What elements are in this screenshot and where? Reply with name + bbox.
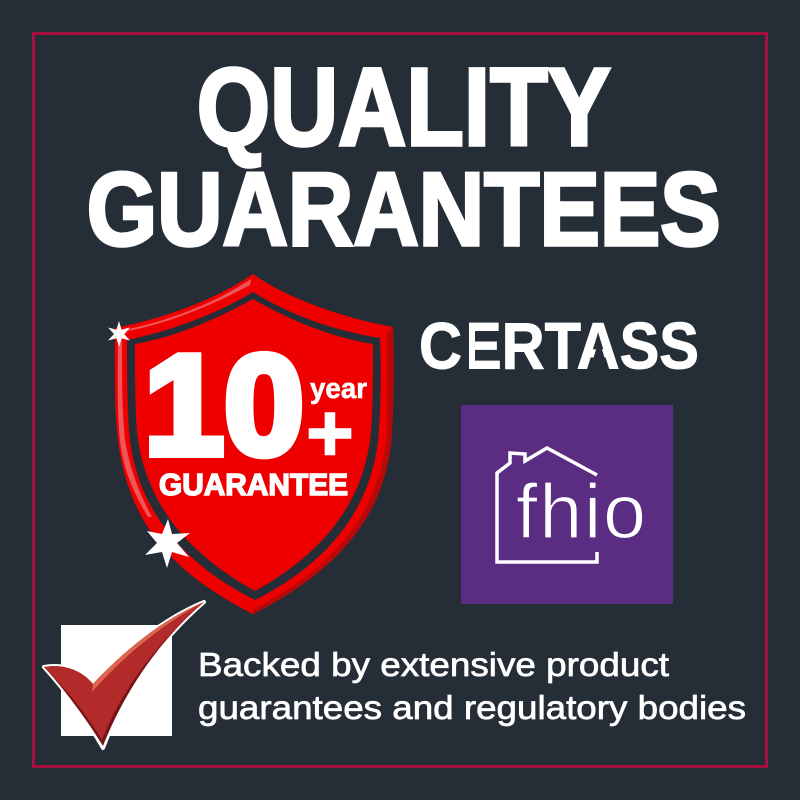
panel: fhio logo [461,405,673,604]
shield dark band [127,292,381,600]
icon: small star [108,321,130,347]
fhio wordmark: fhio [516,469,646,555]
rim shading [253,327,394,614]
white box [61,625,172,736]
shield inner face [135,299,373,591]
rim highlight [118,279,251,517]
title [87,46,721,268]
check outline [44,602,204,748]
title: GUARANTEES [87,152,721,268]
icon: check mark in box [44,602,204,748]
icon: red guarantee shield [108,274,394,614]
icon: large star [145,519,190,568]
shield outer rim [115,274,394,614]
shield text: plus: + [306,388,354,479]
caption: Backed by extensive product [198,646,669,683]
check shadow [44,602,204,746]
shield text: year: year [310,373,367,405]
caption: guarantees and regulatory bodies [198,689,746,726]
CERTASS logo: CERTASS [419,308,699,382]
check body [44,602,204,740]
shield text: 10: 10 [144,326,304,485]
title: QUALITY [197,46,611,169]
shield text: GUARANTEE: GUARANTEE [159,467,348,502]
check highlight [92,602,204,692]
icon: house outline [497,448,597,562]
caption [198,646,746,726]
